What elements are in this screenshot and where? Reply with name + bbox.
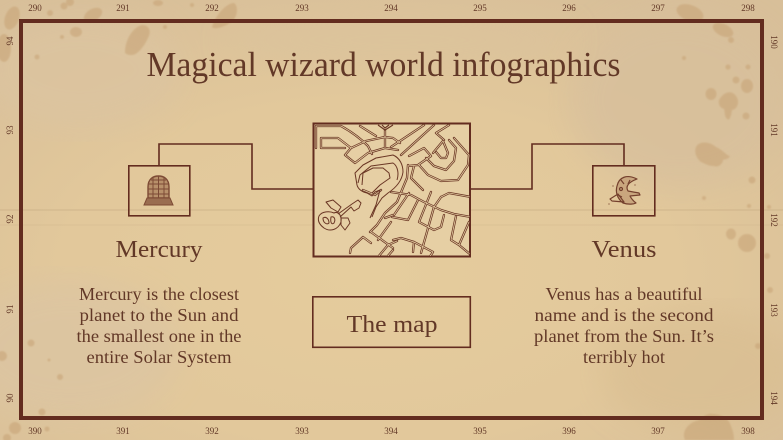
left scale numbers: 90 [5, 393, 15, 402]
connector: left [159, 144, 313, 189]
text block: Mercury: Mercury is the closest [79, 284, 239, 304]
right scale numbers: 191 [769, 123, 779, 137]
bottom scale numbers: 396 [562, 426, 576, 436]
label box: The map: The map [346, 312, 438, 338]
bottom scale numbers: 393 [295, 426, 309, 436]
title: Magical wizard world infographics [146, 45, 620, 84]
text block: Mercury: the smallest one in the [76, 326, 242, 346]
map panel [314, 124, 471, 258]
bottom scale numbers: 398 [741, 426, 755, 436]
top scale numbers: 292 [205, 3, 219, 13]
heading: Mercury: Mercury [116, 237, 202, 263]
text block: Venus: Venus has a beautiful [546, 284, 703, 304]
left scale numbers: 91 [5, 304, 15, 314]
text block: Venus [534, 284, 714, 367]
text block: Venus: planet from the Sun. It’s [534, 326, 714, 346]
icon: domed cage [144, 176, 173, 205]
top scale numbers: 293 [295, 3, 309, 13]
bottom scale numbers: 395 [473, 426, 487, 436]
text block: Mercury: entire Solar System [86, 347, 232, 367]
connector: right [470, 144, 624, 189]
left scale numbers: 93 [5, 125, 15, 134]
left scale numbers [5, 36, 15, 402]
top scale numbers [28, 3, 755, 13]
heading: Venus: Venus [592, 237, 656, 263]
map key [318, 200, 361, 230]
text block: Mercury [76, 284, 242, 367]
top scale numbers: 298 [741, 3, 755, 13]
left icon box [129, 166, 190, 216]
right scale numbers: 194 [769, 391, 779, 405]
right scale numbers [769, 35, 779, 405]
top scale numbers: 297 [651, 3, 665, 13]
label box: The map [313, 297, 470, 347]
icon: crescent moon [610, 177, 640, 204]
left scale numbers: 92 [5, 214, 15, 224]
left scale numbers: 94 [5, 36, 15, 46]
text block: Mercury: planet to the Sun and [80, 305, 239, 325]
bottom scale numbers: 390 [28, 426, 42, 436]
map roads [316, 125, 471, 258]
bottom scale numbers: 392 [205, 426, 219, 436]
bottom scale numbers: 391 [116, 426, 130, 436]
top scale numbers: 295 [473, 3, 487, 13]
bottom scale numbers: 397 [651, 426, 665, 436]
text block: Venus: terribly hot [583, 347, 665, 367]
top scale numbers: 296 [562, 3, 576, 13]
right scale numbers: 192 [769, 213, 779, 227]
text block: Venus: name and is the second [534, 305, 714, 325]
bottom scale numbers [28, 426, 755, 436]
top scale numbers: 290 [28, 3, 42, 13]
top scale numbers: 291 [116, 3, 130, 13]
right scale numbers: 193 [769, 303, 779, 317]
top scale numbers: 294 [384, 3, 398, 13]
road junction top [378, 125, 393, 130]
bottom scale numbers: 394 [384, 426, 398, 436]
right icon box [593, 166, 655, 216]
right scale numbers: 190 [769, 35, 779, 49]
map island [355, 155, 403, 218]
